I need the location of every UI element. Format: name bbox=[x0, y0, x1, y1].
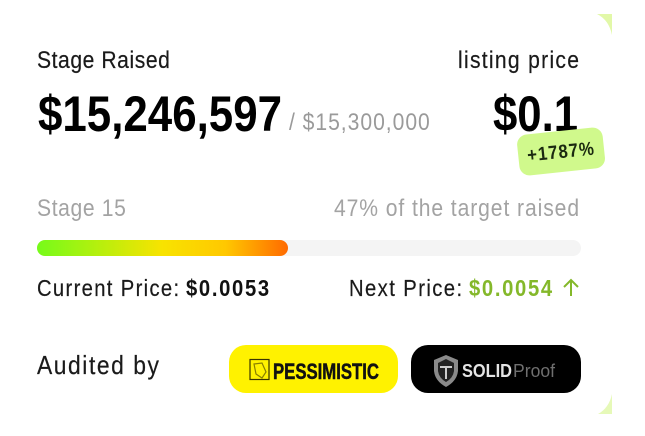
bottom-right corner accent bbox=[598, 394, 612, 414]
audited by label: Audited by bbox=[37, 352, 160, 380]
percent gain badge bbox=[516, 127, 606, 176]
next price bbox=[349, 275, 578, 301]
stage target: / $15,300,000 bbox=[289, 109, 430, 135]
stage number: Stage 15 bbox=[37, 195, 126, 221]
icon: shield bbox=[434, 355, 458, 387]
current price: $0.0053 bbox=[186, 275, 269, 301]
solidproof badge: SOLID bbox=[462, 361, 512, 381]
percent gain badge: +1787% bbox=[526, 138, 595, 166]
pessimistic badge: PESSIMISTIC bbox=[273, 359, 379, 384]
progress bar bbox=[37, 240, 581, 256]
percent raised: 47% of the target raised bbox=[334, 195, 579, 221]
top-right corner accent bbox=[597, 14, 612, 35]
solidproof badge bbox=[411, 345, 581, 393]
icon: pessimistic logo bbox=[250, 360, 269, 380]
listing price value: $0.1 bbox=[493, 86, 578, 142]
pessimistic badge bbox=[229, 345, 398, 393]
solidproof badge: Proof bbox=[513, 361, 556, 381]
listing price label: listing price bbox=[458, 47, 579, 73]
next price: Next Price: bbox=[349, 275, 462, 301]
current price: Current Price: bbox=[37, 275, 179, 301]
current price bbox=[37, 275, 269, 301]
next price: $0.0054 bbox=[469, 275, 552, 301]
amount raised: $15,246,597 bbox=[38, 86, 282, 142]
stage raised label: Stage Raised bbox=[37, 47, 170, 73]
